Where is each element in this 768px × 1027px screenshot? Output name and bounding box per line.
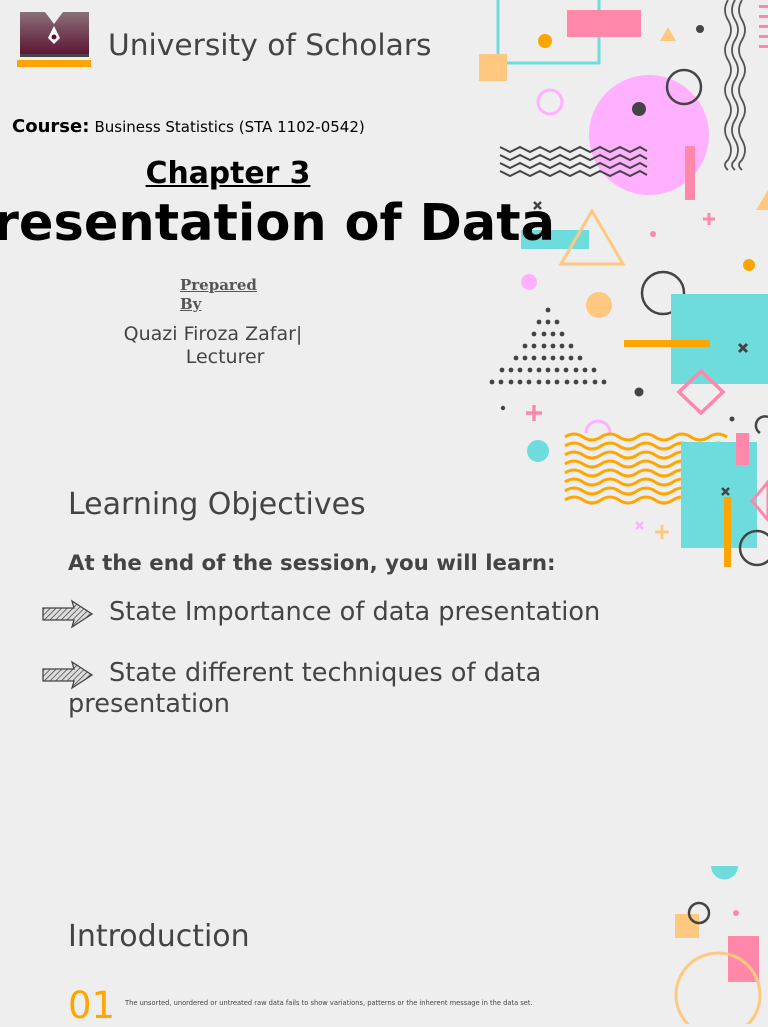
icon: pink stripes right edge <box>759 5 768 48</box>
prepared by: Prepared <box>180 276 257 294</box>
icon: zigzag lines <box>500 147 647 176</box>
heading: introduction: Introduction <box>68 919 250 954</box>
intro point 01: 01 <box>68 984 115 1027</box>
subheading: At the end of the session, you will learn: <box>68 551 556 576</box>
chapter heading: Chapter 3 <box>146 156 310 191</box>
icon: misc mid shapes <box>521 190 768 318</box>
author: Quazi Firoza Zafar| <box>124 323 302 345</box>
icon: teal rectangle lower <box>636 433 768 567</box>
icon: orange waves <box>565 434 727 503</box>
author <box>124 323 302 368</box>
icon: arrow <box>42 600 93 628</box>
logo: book icon <box>17 12 91 67</box>
author: Lecturer <box>186 346 264 368</box>
icon: teal bar under title <box>521 230 589 249</box>
icon: pink bar <box>567 10 641 37</box>
icon: pink diamond <box>679 371 723 413</box>
intro point 01 <box>68 984 533 1027</box>
course line: Course: Business Statistics (STA 1102-0542) <box>12 116 365 137</box>
icon: pink big circle <box>589 70 709 200</box>
icon: lower misc shapes <box>526 405 768 462</box>
objective 2: State different techniques of data presentation <box>68 658 541 719</box>
objective 1: State Importance of data presentation <box>109 597 600 627</box>
icon: arrow <box>42 660 93 690</box>
intro point 01: The unsorted, unordered or untreated raw data fails to show variations, patterns or the inherent message in the data set. <box>125 999 533 1007</box>
icon: small shapes top <box>538 25 704 114</box>
icon: teal square right <box>624 294 768 384</box>
icon: dot triangle <box>490 308 734 422</box>
heading: learning objectives: Learning Objectives <box>68 487 366 522</box>
icon: teal square outline <box>498 0 599 63</box>
icon: vertical waves <box>725 0 745 170</box>
icon: peach square <box>479 54 507 81</box>
prepared by <box>180 276 257 313</box>
prepared by: By <box>180 295 201 313</box>
header: university name: University of Scholars <box>108 28 432 63</box>
icon: bottom right shapes <box>675 866 760 1027</box>
icon: triangle outline <box>561 211 623 264</box>
